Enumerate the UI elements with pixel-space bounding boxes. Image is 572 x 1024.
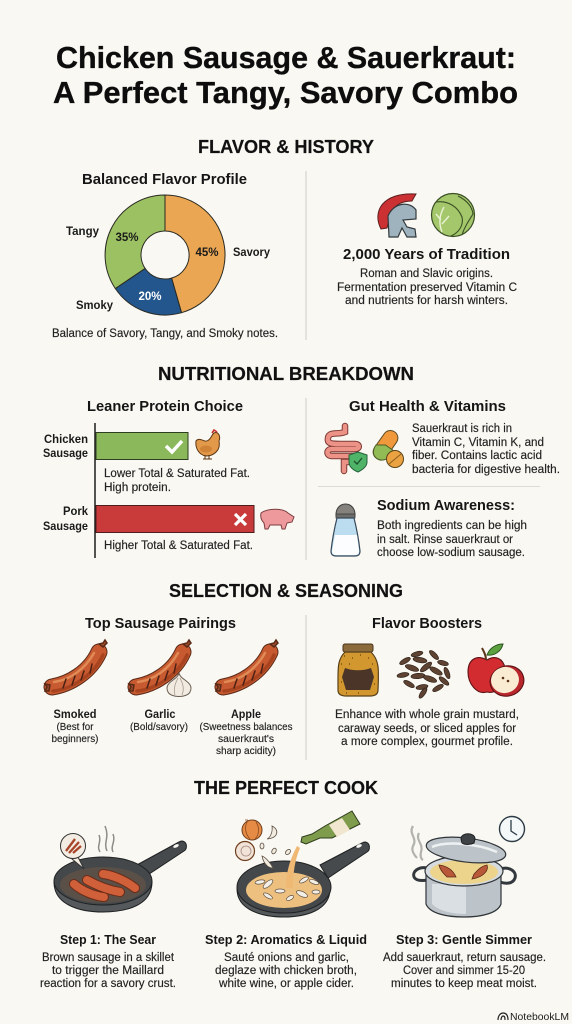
text: pork note: Higher Total & Saturated Fat.: [104, 540, 253, 552]
panel heading: Gut Health & Vitamins: [349, 399, 506, 415]
text block: Vitamin C, Vitamin K, and: [412, 437, 544, 449]
step text: Sauté onions and garlic,: [224, 952, 349, 964]
icon: skillet with sausages: [54, 826, 186, 912]
step heading: Step 2: Aromatics & Liquid: [205, 932, 367, 947]
icon: vitamin pills: [370, 428, 404, 468]
step text: Add sauerkraut, return sausage.: [383, 952, 546, 964]
text block: and nutrients for harsh winters.: [345, 295, 508, 307]
text block: [335, 709, 519, 748]
item: smoked sausage: [45, 640, 107, 745]
panel heading: Flavor Boosters: [372, 616, 482, 632]
step text: Cover and simmer 15-20: [403, 965, 525, 977]
logo: NotebookLM: NotebookLM: [510, 1011, 569, 1023]
heading: flavor and history: FLAVOR & HISTORY: [198, 137, 374, 157]
icon: mustard jar: [338, 644, 378, 696]
heading: nutritional breakdown: NUTRITIONAL BREAKDOWN: [158, 364, 414, 384]
item: garlic sausage: [129, 640, 191, 733]
text block: a more complex, gourmet profile.: [341, 736, 513, 748]
bar: chicken sausage: [43, 432, 188, 460]
item: apple sausage: Apple: [231, 709, 261, 721]
text block: Sauerkraut is rich in: [412, 423, 512, 435]
icon: cabbage: [432, 194, 474, 236]
step text: Brown sausage in a skillet: [42, 952, 175, 964]
step text: white wine, or apple cider.: [218, 978, 354, 990]
item: apple sausage: sauerkraut's: [218, 733, 274, 745]
text block: Roman and Slavic origins.: [360, 268, 493, 280]
step text: to trigger the Maillard: [52, 965, 164, 977]
donut chart: [105, 195, 225, 315]
heading: selection and seasoning: SELECTION & SEASONING: [169, 581, 403, 601]
text block: [377, 520, 527, 559]
panel: flavor boosters: [335, 616, 527, 748]
item: apple sausage: sharp acidity): [216, 745, 276, 757]
step heading: Step 1: The Sear: [60, 932, 156, 947]
item: garlic sausage: (Bold/savory): [130, 721, 188, 733]
bar: pork sausage: [43, 506, 254, 533]
panel heading: Leaner Protein Choice: [87, 399, 243, 415]
heading: the perfect cook: THE PERFECT COOK: [194, 778, 378, 798]
step text: [383, 952, 546, 990]
panel: leaner protein choice: [43, 399, 294, 558]
step text: reaction for a savory crust.: [40, 978, 176, 990]
text block: bacteria for digestive health.: [412, 464, 560, 476]
chart labels: Tangy: [66, 226, 100, 238]
panel heading: Sodium Awareness:: [377, 498, 515, 514]
item: smoked sausage: (Best for: [56, 721, 94, 733]
panel: step 3: [383, 816, 546, 990]
item: smoked sausage: Smoked: [54, 709, 96, 721]
icon: apple: [468, 644, 527, 700]
chart caption: Balance of Savory, Tangy, and Smoky notes.: [52, 328, 278, 340]
bar: pork sausage: Sausage: [43, 521, 88, 533]
panel heading: 2,000 Years of Tradition: [343, 247, 510, 263]
title: Chicken Sausage & Sauerkraut:: [56, 40, 516, 75]
icon: simmering pot with clock: [412, 816, 524, 917]
step text: minutes to keep meat moist.: [391, 978, 537, 990]
text block: [337, 268, 517, 307]
text: chicken note: High protein.: [104, 482, 171, 494]
step text: [215, 952, 357, 990]
step text: deglaze with chicken broth,: [215, 965, 357, 977]
item: garlic sausage: Garlic: [144, 709, 176, 721]
panel: top sausage pairings: [45, 616, 292, 757]
chart labels: 20%: [138, 291, 162, 303]
item: smoked sausage: beginners): [52, 733, 98, 745]
text block: Enhance with whole grain mustard,: [335, 709, 519, 721]
icon: caraway seeds: [397, 649, 451, 699]
panel heading: Top Sausage Pairings: [85, 616, 236, 632]
text block: fiber. Contains lactic acid: [412, 450, 542, 462]
text block: caraway seeds, or sliced apples for: [338, 723, 516, 735]
chart labels: Savory: [233, 247, 271, 259]
text block: Fermentation preserved Vitamin C: [337, 282, 517, 294]
panel: balanced flavor profile: [52, 172, 278, 340]
icon: intestines: [328, 426, 367, 472]
item: apple sausage: (Sweetness balances: [200, 721, 292, 733]
bar: chicken sausage: Sausage: [43, 448, 88, 460]
step text: [40, 952, 176, 990]
text: chicken note: [104, 468, 250, 494]
text block: in salt. Rinse sauerkraut or: [377, 534, 513, 546]
icon: chicken: [196, 430, 220, 459]
panel: sodium awareness: [331, 498, 527, 559]
text block: [412, 423, 560, 476]
panel: gut health and vitamins: [328, 399, 560, 476]
chart labels: 35%: [115, 232, 139, 244]
text block: choose low-sodium sausage.: [377, 547, 525, 559]
bar: chicken sausage: Chicken: [44, 434, 88, 446]
title: [53, 40, 518, 110]
icon: pig: [261, 509, 294, 529]
text: chicken note: Lower Total & Saturated Fat.: [104, 468, 250, 480]
chart labels: [66, 226, 271, 312]
panel: tradition: [337, 194, 517, 307]
text block: Both ingredients can be high: [377, 520, 527, 532]
item: apple sausage: [200, 640, 292, 757]
bar: pork sausage: Pork: [63, 506, 89, 518]
chart labels: Smoky: [76, 300, 114, 312]
step heading: Step 3: Gentle Simmer: [396, 932, 532, 947]
title: A Perfect Tangy, Savory Combo: [53, 75, 518, 110]
chart labels: 45%: [195, 247, 219, 259]
panel heading: Balanced Flavor Profile: [82, 172, 247, 188]
panel: step 2: [205, 811, 369, 990]
icon: skillet with aromatics and wine: [236, 811, 369, 917]
panel: step 1: [40, 826, 186, 990]
icon: salt shaker: [331, 504, 360, 556]
icon: roman helmet: [378, 194, 416, 237]
